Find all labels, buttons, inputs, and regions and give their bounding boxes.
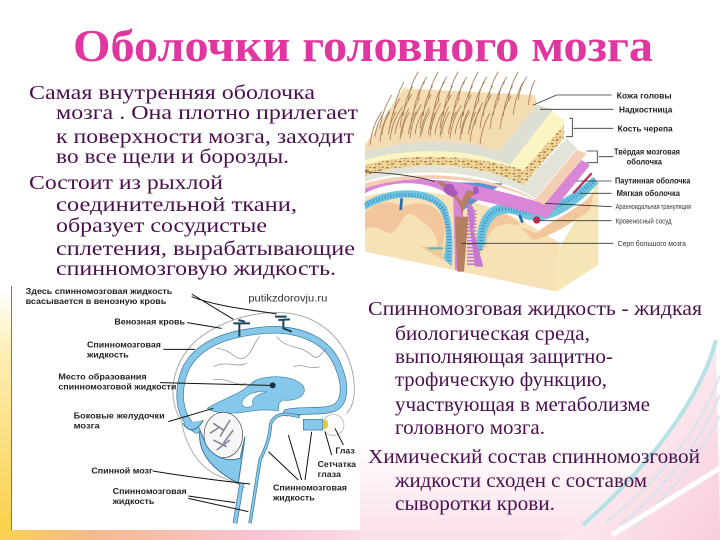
cerebellum [204,412,243,458]
layer labels: Паутинная оболочка [615,177,691,186]
diagram: cerebrospinal fluid circulation [11,286,360,530]
sulci [401,198,523,223]
blue sinus [432,182,503,210]
diagram labels: Спинномозговая [273,484,347,493]
spongy bone [365,125,564,185]
layer labels: Кровеносный сосуд [616,217,672,226]
layer labels: Серп большого мозга [618,239,687,248]
diagram panel [11,286,360,530]
eye [303,414,344,436]
diagram labels [26,287,357,506]
head outline [173,313,354,488]
diagram labels: Здесь спинномозговая жидкость [26,287,172,296]
layer labels: Мягкая оболочка [617,189,681,198]
diagram labels: Место образования [58,372,147,381]
block side face [557,182,598,292]
granulations [233,317,292,337]
text block: inner membrane description: сплетения, вырабатывающие [56,238,355,260]
pointer lines [365,95,613,243]
pia and blue space left [365,190,453,267]
block front face [365,191,560,292]
diagram labels: глаза [318,470,342,479]
arachnoid granulations [444,184,479,196]
text block: cerebrospinal fluid description: Спинномозговая жидкость - жидкая [368,298,703,320]
text block: inner membrane description [29,82,358,280]
text block: cerebrospinal fluid description: Химический состав спинномозговой [368,446,700,468]
brain sulci [213,337,327,384]
brain cortex folds [365,202,445,260]
diagram labels: жидкость [272,494,315,503]
lateral ventricle [207,377,304,413]
layer labels: Кожа головы [617,91,672,100]
bone cortex [365,112,564,170]
layer labels: Кость черепа [618,124,673,133]
title: Оболочки головного мозга [73,20,653,71]
periosteum [365,105,553,165]
diagram labels: Спинномозговая [87,340,161,349]
cistern and lower channels [183,420,245,483]
layer labels [614,91,691,248]
text block: inner membrane description: соединительной ткани, [56,194,297,216]
layer labels: Надкостница [619,105,673,114]
layer labels: Арахноидальная грануляция [616,202,691,211]
scalp [365,88,537,152]
diagram labels: жидкость [86,350,129,359]
diagram labels: Глаз [335,446,355,455]
hair [370,72,535,145]
text block: cerebrospinal fluid description [368,298,703,515]
pointer lines [153,294,343,512]
text block: cerebrospinal fluid description: биологическая среда, [395,323,590,345]
diagram labels: мозга [74,422,100,431]
blood vessel [533,216,540,224]
layer labels: оболочка [627,158,663,167]
diagram labels: Сетчатка [318,460,357,469]
diagram labels: Боковые желудочки [74,412,165,421]
diagram labels: спинномозговой жидкости [58,382,176,391]
text block: inner membrane description: образует сосудистые [56,215,267,237]
text block: cerebrospinal fluid description: выполняющая защитно- [395,346,613,368]
text block: inner membrane description: спинномозговую жидкость. [56,258,336,280]
purple arachnoid [365,160,590,270]
text block: cerebrospinal fluid description: жидкости сходен с составом [394,470,647,492]
text block: cerebrospinal fluid description: сыворотки крови. [395,493,555,515]
dura peach layer [365,150,587,205]
text block: cerebrospinal fluid description: трофическую функцию, [395,369,607,391]
diagram labels: всасывается в венозную кровь [26,297,166,306]
text block: inner membrane description: Состоит из рыхлой [29,172,223,194]
text block: cerebrospinal fluid description: головного мозга. [395,417,545,439]
diagram labels: Спинной мозг [91,467,153,476]
diagram: layers of the meninges [365,72,691,292]
falx [437,182,477,272]
diagram labels: Спинномозговая [113,487,187,496]
text block: inner membrane description: к поверхности мозга, заходит [56,126,354,148]
website label: putikzdorovju.ru [248,294,327,305]
text block: cerebrospinal fluid description: участвующая в метаболизме [395,394,650,416]
text block: inner membrane description: мозга . Она плотно прилегает [56,102,358,124]
layer labels: Твёрдая мозговая [614,147,680,156]
diagram labels: Венозная кровь [114,318,185,327]
blue subarachnoid space [180,330,344,430]
diagram labels: жидкость [112,497,154,506]
outer dura layer [365,138,577,198]
text block: inner membrane description: во все щели и борозды. [56,146,289,168]
text block: inner membrane description: Самая внутренняя оболочка [29,82,315,104]
